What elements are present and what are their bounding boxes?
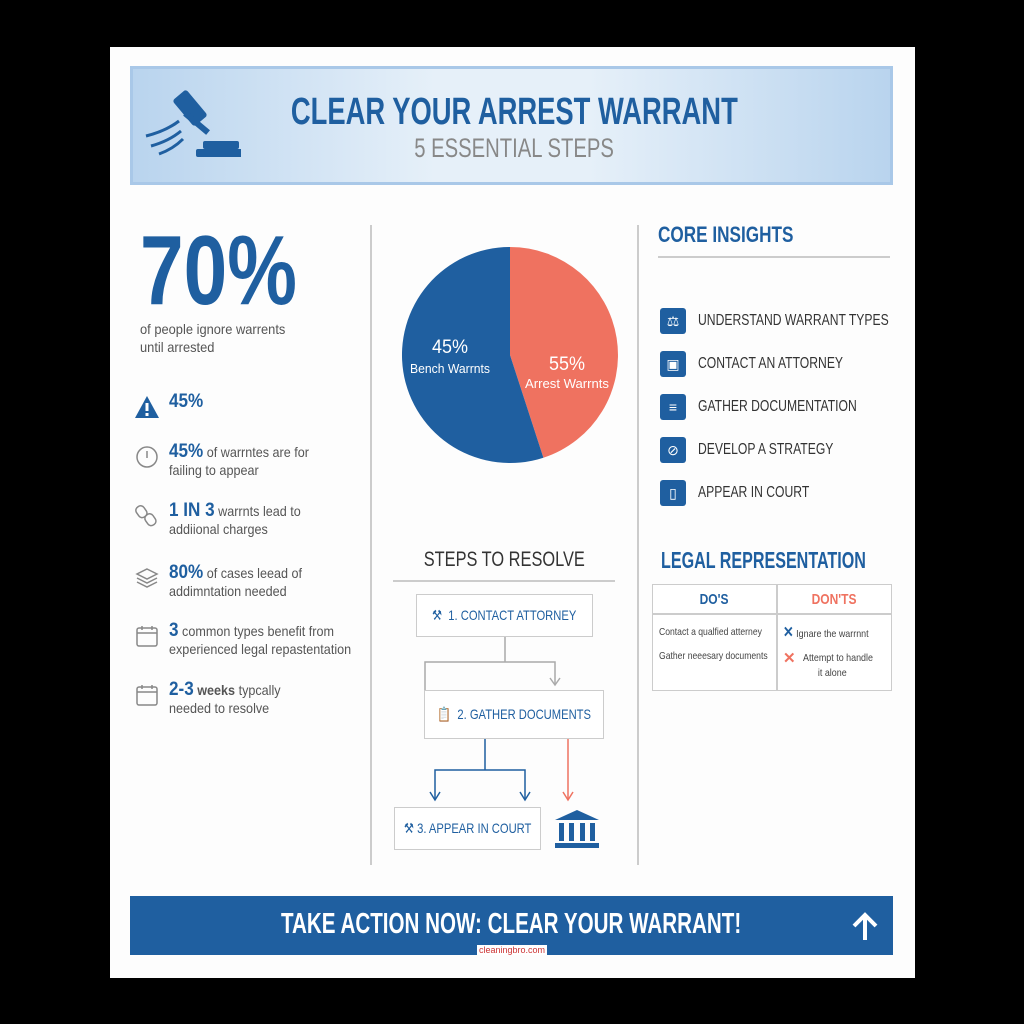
donts column: ✕ Ignare the warrnnt — [783, 624, 869, 641]
insight 4: DEVELOP A STRATEGY — [698, 441, 833, 458]
heading: steps to resolve — [393, 548, 615, 582]
insight 2: ▣ — [666, 356, 680, 372]
insight 5 — [660, 480, 810, 506]
step 3 box — [394, 807, 541, 850]
pie chart: 55% — [549, 354, 585, 375]
icon: up arrow — [852, 912, 878, 940]
stat: 1 in 3 — [135, 500, 301, 537]
insight 3: GATHER DOCUMENTATION — [698, 398, 857, 415]
stat: 80%: 80% of cases leead of — [169, 562, 302, 583]
card background — [110, 47, 915, 978]
insight 3: ≡ — [669, 399, 677, 415]
insight 5: APPEAR IN COURT — [698, 484, 809, 501]
stat: failing to appear: 45% of warrntes are for — [169, 441, 309, 462]
insight 4 — [660, 437, 833, 463]
donts column: it alone — [818, 667, 847, 679]
icon: courthouse — [555, 810, 599, 848]
icon: gavel — [146, 90, 241, 157]
header banner — [130, 66, 893, 185]
stat: 2-3 weeks: 2-3 weeks typcally — [169, 679, 281, 700]
pie chart: 45% — [432, 337, 468, 358]
donts column — [783, 591, 873, 679]
title: CLEAR YOUR ARREST WARRANT — [291, 91, 738, 133]
stat caption: until arrested — [140, 339, 214, 355]
pie chart: Arrest Warrnts — [525, 376, 609, 391]
donts column: DON'TS — [812, 591, 856, 608]
column dividers — [370, 225, 372, 865]
insight 4: ⊘ — [667, 442, 679, 458]
step 3 box: ⚒ 3. APPEAR IN COURT — [404, 820, 531, 836]
stat: 3 common types: experienced legal repastentation — [169, 641, 351, 657]
stat: 2-3 weeks — [136, 679, 281, 716]
call to action banner: TAKE ACTION NOW: CLEAR YOUR WARRANT! — [281, 908, 742, 940]
subtitle: 5 ESSENTIAL STEPS — [415, 133, 614, 163]
insight 2 — [660, 351, 843, 377]
insight 5: ▯ — [669, 485, 677, 501]
dos column: Contact a qualfied atterney — [659, 626, 762, 638]
stat: 3 common types: 3 common types benefit from — [169, 620, 334, 641]
dos column — [659, 591, 768, 662]
dos column: Gather neeesary documents — [659, 650, 768, 662]
insight 1 — [660, 308, 889, 334]
step 1 box: ⚒ 1. CONTACT ATTORNEY — [432, 607, 577, 623]
step 2 box: 📋 2. GATHER DOCUMENTS — [437, 706, 591, 722]
stat: failing to appear — [136, 441, 309, 478]
pie chart — [402, 247, 618, 463]
heading: core insights: CORE INSIGHTS — [658, 222, 793, 247]
heading: steps to resolve: STEPS TO RESOLVE — [423, 548, 585, 571]
insight 1: UNDERSTAND WARRANT TYPES — [698, 312, 889, 329]
footer url: cleaningbro.com — [479, 945, 545, 955]
call to action banner — [130, 896, 893, 955]
stat: 1 in 3: 1 IN 3 warrnts lead to — [169, 500, 301, 521]
stat: 2-3 weeks: needed to resolve — [169, 700, 269, 716]
heading: legal representation: LEGAL REPRESENTATION — [661, 547, 866, 573]
step 2 box — [424, 690, 604, 739]
flowchart arrows — [424, 637, 574, 802]
dos and donts table — [652, 584, 892, 691]
heading: core insights — [658, 222, 890, 258]
stat caption: of people ignore warrents — [140, 321, 285, 337]
donts column: Attempt to handle — [803, 652, 873, 664]
step 1 box — [416, 594, 593, 637]
dos column: DO'S — [700, 591, 729, 608]
stat: 80% — [136, 562, 302, 599]
donts column: ✕ — [783, 650, 796, 667]
pie chart: Bench Warrnts — [410, 361, 490, 376]
insight 1: ⚖ — [667, 313, 679, 329]
stat caption — [140, 321, 285, 355]
stat: 3 common types — [136, 620, 351, 657]
big stat 70%: 70% — [140, 215, 297, 325]
stat: failing to appear: failing to appear — [169, 462, 259, 478]
insight 3 — [660, 394, 857, 420]
stat: 1 in 3: addiional charges — [169, 521, 268, 537]
insight 2: CONTACT AN ATTORNEY — [698, 355, 843, 372]
insight list — [660, 308, 889, 506]
stat: 80%: addimntation needed — [169, 583, 287, 599]
stat: 45% warning: 45% — [169, 391, 203, 412]
stat: 45% warning — [135, 391, 203, 418]
